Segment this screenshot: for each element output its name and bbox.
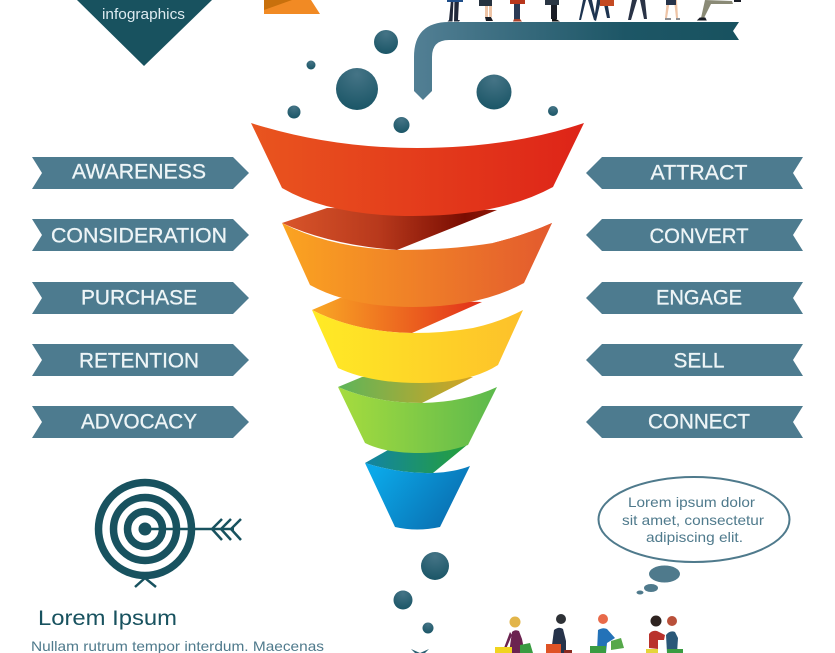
shopper 3: [590, 614, 624, 653]
icon: target with arrow: [98, 482, 241, 587]
left ribbon: advocacy: [32, 406, 249, 438]
left ribbon: purchase: PURCHASE: [81, 286, 197, 310]
right ribbon: connect: [586, 406, 803, 438]
thought bubble: adipiscing elit.: [646, 529, 743, 545]
right ribbon: convert: [586, 219, 803, 251]
falling balls below funnel: [394, 552, 449, 634]
heading: Lorem Ipsum: Lorem Ipsum: [38, 606, 177, 630]
right ribbon: sell: [586, 344, 803, 376]
top badge: infographics: [77, 0, 212, 66]
right ribbon: convert: CONVERT: [650, 225, 749, 248]
funnel band 5: blue: [365, 463, 470, 530]
shopper 1: [495, 616, 533, 653]
left ribbon: consideration: CONSIDERATION: [51, 224, 227, 248]
orange corner shape: [264, 0, 320, 14]
shoppers at bottom: [495, 614, 683, 653]
falling balls above funnel: [288, 30, 558, 133]
right ribbon: sell: SELL: [674, 350, 724, 372]
left ribbon: purchase: [32, 282, 249, 314]
right ribbon: engage: [586, 282, 803, 314]
left ribbon: retention: RETENTION: [79, 350, 199, 372]
funnel band 3 fold: [338, 377, 473, 403]
bottom arrow tip: [411, 649, 429, 653]
people walking on top of the pipe: [447, 0, 741, 22]
left ribbon: consideration: [32, 219, 249, 251]
thought bubble: [598, 477, 790, 594]
left ribbon: awareness: [32, 157, 249, 189]
right ribbon: connect: CONNECT: [648, 410, 750, 434]
funnel band 1: red: [251, 123, 584, 216]
funnel band 3: yellow: [312, 310, 523, 383]
shopper 5: [666, 616, 683, 653]
funnel band 4: green: [338, 387, 497, 453]
funnel band 2 back edge: [493, 223, 552, 243]
left ribbon: advocacy: ADVOCACY: [81, 410, 197, 434]
top badge: infographics: infographics: [102, 7, 185, 23]
shopper 4: [646, 616, 665, 653]
funnel band 2 fold: [312, 298, 482, 333]
thought bubble: sit amet, consectetur: [622, 512, 764, 528]
right ribbon: engage: ENGAGE: [656, 286, 742, 310]
left ribbon: retention: [32, 344, 249, 376]
entry pipe arrow: [414, 22, 739, 100]
funnel back fold 1: [282, 208, 497, 250]
left ribbon: awareness: AWARENESS: [72, 160, 206, 184]
right ribbon: attract: [586, 157, 803, 189]
funnel band 2: orange: [282, 223, 552, 307]
thought bubble: Lorem ipsum dolor: [628, 494, 755, 510]
funnel band 4 fold: [365, 445, 467, 473]
funnel: [251, 123, 584, 530]
shopper 2: [546, 614, 572, 653]
right ribbon: attract: ATTRACT: [650, 162, 748, 184]
